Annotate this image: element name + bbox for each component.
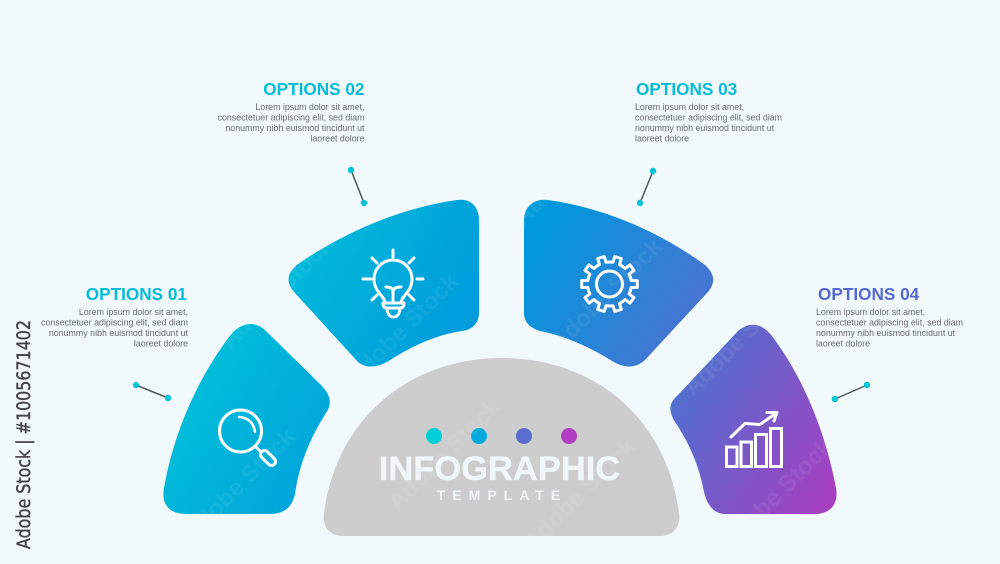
connector: option 3: [637, 168, 656, 206]
text block: options 02: [218, 79, 365, 144]
subtitle: TEMPLATE: [437, 487, 567, 503]
side credit: stock id: Adobe Stock | #1005671402: [14, 320, 35, 549]
text block: options 02: Lorem ipsum dolor sit amet,: [255, 102, 364, 112]
watermark: repeated stock text: Adobe Stock: [161, 108, 285, 231]
text block: options 02: OPTIONS 02: [263, 79, 364, 99]
text block: options 02: nonummy nibh euismod tincidunt ut: [225, 123, 365, 133]
text block: options 01: laoreet dolore: [134, 338, 188, 348]
text block: options 03: Lorem ipsum dolor sit amet,: [635, 102, 744, 112]
text block: options 03: nonummy nibh euismod tincidunt ut: [635, 123, 775, 133]
watermark: repeated stock text: Adobe Stock: [705, 63, 829, 186]
panel: option 1 segment: [163, 324, 330, 514]
watermark: repeated stock text: Adobe Stock: [38, 363, 162, 486]
text block: options 04: consectetuer adipiscing elit, sed diam: [816, 318, 963, 328]
connector: option 2: [348, 167, 367, 206]
center dots: [426, 428, 577, 444]
text block: options 03: OPTIONS 03: [636, 79, 737, 99]
watermark: repeated stock text: Adobe Stock: [375, 63, 499, 186]
text block: options 02: consectetuer adipiscing elit, sed diam: [218, 112, 364, 122]
text block: options 03: [635, 79, 782, 144]
text block: options 04: nonummy nibh euismod tincidunt ut: [816, 328, 956, 338]
text block: options 04: OPTIONS 04: [818, 284, 920, 304]
panel: center semicircle: [324, 358, 679, 536]
text block: options 04: laoreet dolore: [816, 338, 870, 348]
watermark: repeated stock text: Adobe Stock: [178, 423, 302, 546]
watermark: repeated stock text: Adobe Stock: [383, 393, 507, 516]
panel: option 3 segment: [524, 200, 713, 366]
watermark: repeated stock text: Adobe Stock: [43, 55, 167, 178]
watermark: repeated stock text: Adobe Stock: [545, 233, 669, 356]
watermark: repeated stock text: Adobe Stock: [341, 268, 465, 391]
icon: gear: [582, 255, 637, 313]
watermark: repeated stock text: Adobe Stock: [508, 108, 632, 231]
text block: options 04: Lorem ipsum dolor sit amet,: [816, 307, 925, 317]
text block: options 01: Lorem ipsum dolor sit amet,: [79, 307, 188, 317]
text block: options 01: [41, 284, 189, 348]
panel: option 2 segment: [289, 200, 479, 367]
icon: magnifier: [220, 410, 277, 467]
watermark: repeated stock text: Adobe Stock: [878, 238, 1000, 361]
text block: options 03: consectetuer adipiscing elit, sed diam: [635, 112, 782, 122]
icon: growth chart: [726, 412, 782, 466]
text block: options 01: consectetuer adipiscing elit, sed diam: [41, 318, 188, 328]
title: INFOGRAPHIC: [379, 450, 620, 488]
watermark: repeated stock text: Adobe Stock: [833, 115, 957, 238]
watermark: repeated stock text: Adobe Stock: [678, 278, 802, 401]
icon: light bulb: [363, 250, 423, 317]
watermark: repeated stock text: Adobe Stock: [715, 433, 839, 556]
panel: option 4 segment: [670, 325, 837, 514]
watermark: repeated stock text: Adobe Stock: [215, 231, 339, 354]
text block: options 03: laoreet dolore: [635, 134, 689, 144]
text block: options 04: [816, 284, 963, 348]
watermark: repeated stock text: Adobe Stock: [518, 433, 642, 556]
text block: options 01: OPTIONS 01: [86, 284, 187, 304]
connector: option 1: [133, 382, 171, 401]
text block: options 02: laoreet dolore: [310, 134, 365, 144]
text block: options 01: nonummy nibh euismod tincidunt ut: [49, 328, 189, 338]
connector: option 4: [832, 382, 870, 402]
